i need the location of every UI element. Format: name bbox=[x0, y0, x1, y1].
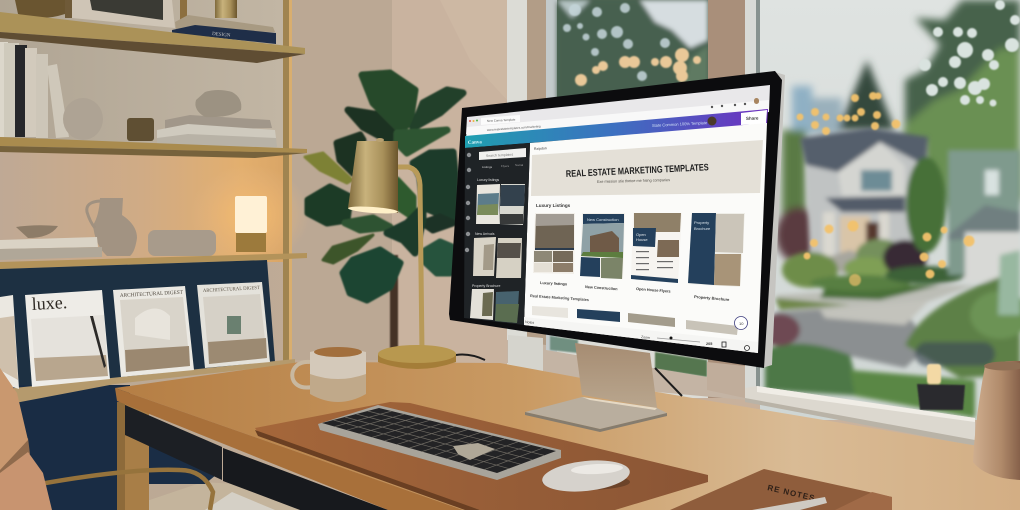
plant: fiddle leaf fig bbox=[305, 73, 463, 355]
magazine: architectural digest bbox=[113, 286, 194, 377]
monitor bbox=[449, 71, 785, 368]
lower row of template thumbnails bbox=[532, 306, 738, 335]
silver back edge bbox=[762, 72, 785, 368]
browser tabs and toolbar: New Canva Template bbox=[487, 117, 516, 123]
magazine: architectural digest 2 bbox=[197, 282, 270, 368]
desk bbox=[115, 362, 1020, 510]
stacked books bbox=[157, 115, 277, 147]
floor and desk underside bbox=[117, 402, 300, 510]
template card: new construction: New Construction bbox=[587, 217, 619, 222]
left dark sidebar: Luxury listings bbox=[477, 178, 499, 182]
table lamp bbox=[235, 196, 267, 252]
template card: open house flyers: House bbox=[636, 237, 648, 242]
template card: luxury listings bbox=[533, 213, 575, 286]
template card: new construction: New Construction bbox=[585, 285, 618, 291]
vase bbox=[63, 98, 103, 140]
page footer controls: Notes bbox=[525, 320, 535, 325]
glass visible under monitor bbox=[550, 336, 578, 353]
house bbox=[805, 130, 930, 262]
stacked bowls bbox=[148, 230, 216, 256]
sidebar thumbnails bbox=[470, 184, 525, 323]
left dark sidebar: Social bbox=[515, 163, 524, 167]
purple brand bar: Share bbox=[746, 116, 759, 121]
desk lamp bbox=[348, 138, 456, 369]
magazine: partial left bbox=[0, 295, 19, 389]
page footer controls: 10 bbox=[739, 321, 744, 326]
jug bbox=[87, 198, 137, 256]
window sill bbox=[745, 386, 975, 446]
shrubs around house bbox=[856, 239, 904, 271]
template card: property brochure: Property bbox=[694, 220, 709, 225]
template card: new construction bbox=[580, 213, 625, 291]
magazine: architectural digest 2: ARCHITECTURAL DIGEST bbox=[203, 286, 260, 294]
coffee mug bbox=[292, 347, 366, 402]
lawn and road bbox=[775, 285, 975, 310]
section heading: luxury listings: Luxury Listings bbox=[536, 203, 571, 208]
foreground shrubs bbox=[905, 270, 1020, 378]
navy panel and lower shelf bbox=[0, 260, 295, 510]
stone bowl vase bbox=[195, 90, 241, 117]
lamp shade bbox=[348, 141, 398, 213]
desk mat bbox=[255, 402, 708, 510]
outdoor lantern bbox=[917, 364, 965, 410]
browser tabs and toolbar: www.realestatetemplates.com/marketing bbox=[487, 124, 541, 132]
template card: property brochure: Property Brochure bbox=[694, 294, 730, 302]
magazine: luxe bbox=[25, 290, 110, 387]
bokeh lights bbox=[796, 92, 974, 286]
gold upright bbox=[283, 0, 292, 365]
top shelf items bbox=[15, 0, 276, 44]
shelf 1 bbox=[0, 12, 305, 54]
page footer controls: Zoom bbox=[641, 335, 650, 340]
shelf 2 bbox=[0, 137, 307, 153]
template card: luxury listings: Luxury listings bbox=[540, 281, 567, 286]
top shelf items: DESIGN bbox=[212, 32, 231, 39]
notebook and pen bbox=[670, 469, 892, 510]
purple brand bar: State Common 100% Template bbox=[652, 120, 708, 128]
left dark sidebar: Search templates bbox=[486, 153, 514, 158]
page header band: Exe mission stie thetoe me hsing comparies bbox=[597, 178, 670, 184]
left dark sidebar bbox=[464, 143, 530, 325]
white canvas bbox=[524, 123, 767, 353]
page header band bbox=[531, 140, 763, 196]
lamp base bbox=[378, 354, 456, 369]
page footer controls bbox=[524, 316, 758, 353]
mouse bbox=[541, 456, 631, 496]
page header band: Rzipdon bbox=[534, 146, 547, 151]
magazines bbox=[0, 282, 270, 389]
browser tabs and toolbar bbox=[466, 85, 770, 138]
template card: open house flyers bbox=[631, 213, 682, 294]
power cable bbox=[456, 355, 682, 396]
small bowl on books bbox=[0, 225, 102, 260]
window: right pane with blurred street view bbox=[760, 0, 1020, 420]
magazine: architectural digest: ARCHITECTURAL DIGEST bbox=[120, 290, 184, 299]
left dark sidebar: Flyers bbox=[501, 164, 510, 168]
shelf 1 books bbox=[0, 42, 69, 138]
brass cup bbox=[127, 118, 154, 141]
page footer controls: 205 bbox=[706, 342, 712, 346]
keyboard bbox=[318, 405, 561, 480]
neighbouring garage behind glass bbox=[948, 150, 1020, 275]
template card: open house flyers: Open bbox=[636, 232, 646, 237]
template card: property brochure: Brochure bbox=[694, 226, 711, 231]
notebook and pen: RE NOTES bbox=[767, 483, 816, 503]
template card: property brochure bbox=[688, 213, 745, 302]
purple brand bar bbox=[465, 109, 768, 148]
window: centre pane with outdoor trees bbox=[507, 0, 760, 400]
monitor stand bbox=[525, 343, 667, 432]
screen heading: REAL ESTATE MARKETING TEMPLATES bbox=[566, 162, 709, 180]
shelving unit bbox=[0, 0, 307, 365]
template card: open house flyers: Open House Flyers bbox=[636, 287, 671, 294]
section heading: real estate marketing templates: Real Estate Marketing Templates bbox=[530, 294, 589, 302]
office chair bbox=[0, 368, 213, 510]
left dark sidebar: Listings bbox=[482, 165, 493, 169]
shelf 3 bbox=[0, 253, 307, 269]
bezel bbox=[449, 71, 782, 368]
lamp arm bbox=[398, 167, 422, 352]
left dark sidebar: New Arrivals bbox=[475, 232, 495, 236]
left dark sidebar: Property Brochure bbox=[472, 284, 500, 288]
magazine: luxe: luxe. bbox=[31, 292, 68, 314]
ceramic vase bbox=[973, 361, 1020, 480]
purple brand bar: Canva bbox=[468, 140, 482, 146]
